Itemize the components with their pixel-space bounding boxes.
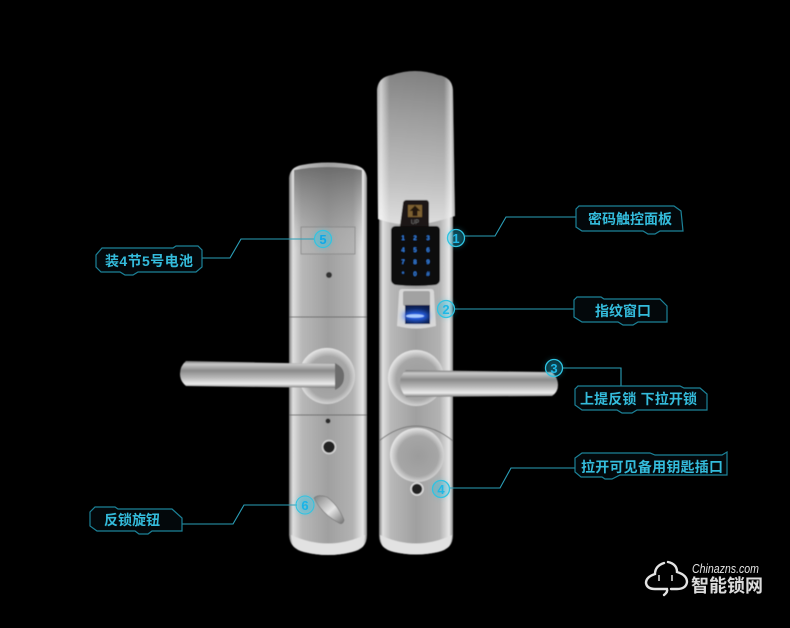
label box (575, 452, 727, 479)
round dimple (390, 428, 444, 482)
label text: 上提反锁 下拉开锁 (580, 391, 697, 407)
sensor cover (403, 291, 430, 306)
touch keypad: 6 (426, 248, 430, 254)
leader line (449, 468, 575, 488)
label box (90, 507, 182, 534)
lower panel seam (379, 426, 453, 441)
right handle (400, 370, 558, 397)
fingerprint module (397, 289, 436, 328)
key cylinder (322, 440, 336, 454)
touch keypad: 3 (426, 236, 430, 242)
label text: 密码触控面板 (588, 211, 672, 227)
left handle rosette (299, 348, 355, 404)
watermark logo (646, 561, 763, 596)
touch keypad: 9 (426, 260, 430, 266)
label text: 拉开可见备用钥匙插口 (581, 459, 723, 475)
right lock body (379, 200, 453, 554)
left handle (180, 361, 340, 388)
label text: 装4节5号电池 (105, 253, 193, 269)
right handle rosette (388, 350, 444, 406)
touch keypad: # (426, 272, 430, 278)
badge number: 3 (550, 361, 558, 376)
leader line (181, 505, 297, 524)
left lock top shade (294, 167, 362, 250)
leader line (465, 217, 576, 236)
label box (576, 206, 683, 234)
callout 2: fingerprint window (437, 297, 667, 325)
left lock seams (289, 317, 367, 415)
badge number: 6 (301, 498, 309, 513)
right lock bottom rim (380, 535, 452, 554)
UP arrow icon (408, 205, 422, 217)
touch keypad: * (402, 272, 405, 278)
UP sign (400, 200, 429, 226)
icon: cloud (646, 562, 687, 595)
label box (574, 297, 667, 325)
label text: 反锁旋钮 (104, 512, 160, 528)
number badge (448, 230, 464, 246)
label box (575, 386, 707, 413)
badge number: 5 (319, 232, 327, 247)
callout 5: battery (96, 230, 332, 275)
touch keypad: 5 (413, 248, 417, 254)
callout 4: backup key slot (432, 452, 727, 498)
number badge (546, 360, 562, 376)
touch keypad: 7 (401, 260, 405, 266)
icon: cloud eyes (659, 575, 672, 581)
label text: 指纹窗口 (595, 303, 651, 319)
glow (432, 480, 450, 498)
UP plate (400, 200, 429, 226)
fingerprint housing (397, 289, 436, 328)
glow (447, 229, 465, 247)
touch keypad: 8 (413, 260, 417, 266)
glow (296, 496, 314, 514)
battery cover plate (301, 227, 355, 254)
touch keypad: 2 (413, 236, 417, 242)
blue sensor window (405, 305, 430, 324)
small screw hole (326, 272, 332, 278)
right lock panel (377, 71, 558, 554)
keypad panel (391, 226, 440, 286)
touch keypad (391, 226, 440, 286)
thumb turn knob (314, 496, 344, 524)
left handle collar (335, 363, 344, 390)
glow (545, 359, 563, 377)
glow (437, 300, 455, 318)
lower screw (326, 418, 330, 424)
badge number: 4 (437, 482, 445, 497)
left lock body (289, 162, 367, 555)
number badge (314, 230, 332, 248)
callout 3: lift to lock, pull to open (545, 359, 707, 413)
leader line (563, 368, 621, 387)
left lock panel (180, 162, 367, 555)
callout 6: thumb turn (90, 496, 314, 534)
left lock bottom rim (291, 535, 365, 555)
key hole (411, 483, 423, 495)
touch keypad: 0 (413, 272, 417, 278)
callout 1: touch panel (447, 206, 683, 247)
blue light glow (403, 311, 429, 321)
cover highlight (377, 71, 455, 225)
blue light (406, 314, 424, 318)
badge number: 2 (442, 302, 450, 317)
leader line (454, 308, 574, 310)
label box (96, 246, 202, 275)
site url: Chinazns.com (692, 561, 759, 576)
number badge (432, 480, 450, 498)
touch keypad: 4 (401, 248, 405, 254)
number badge (438, 300, 454, 318)
glow (314, 230, 332, 248)
site name: 智能锁网 (691, 575, 763, 596)
leader line (202, 239, 314, 258)
keypad digits: 1 (401, 236, 405, 242)
badge number: 1 (452, 231, 460, 246)
right lock sliding cover (377, 71, 455, 225)
number badge (296, 496, 314, 514)
UP text: UP (411, 220, 419, 226)
